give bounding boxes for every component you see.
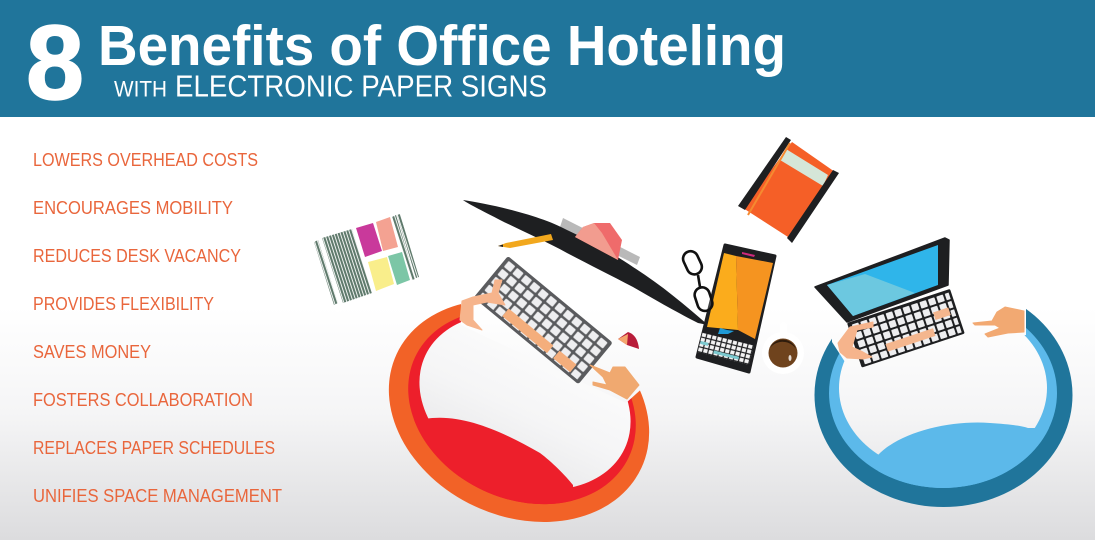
laptop [815, 238, 965, 368]
red chair [388, 304, 650, 522]
chair seat [414, 418, 573, 504]
benefits list: UNIFIES SPACE MANAGEMENT [33, 486, 282, 506]
icon: coffee cup [762, 322, 804, 374]
chair inner red ring [376, 274, 668, 540]
icon: printed paper [308, 208, 425, 312]
icon: monitor seen from above [463, 200, 708, 325]
chair seat [878, 422, 1049, 488]
benefits list: REPLACES PAPER SCHEDULES [33, 438, 275, 458]
chair outer orange shell [352, 259, 686, 540]
laptop keyboard [847, 289, 965, 368]
right hand pointing [590, 365, 639, 399]
benefits list: REDUCES DESK VACANCY [33, 246, 241, 266]
title: Benefits of Office Hoteling [98, 14, 786, 78]
left hand on laptop [838, 322, 873, 359]
chair outer blue shell [814, 283, 1072, 507]
key highlight right [553, 351, 577, 372]
chair hollow [839, 303, 1047, 473]
benefits list: FOSTERS COLLABORATION [33, 390, 253, 410]
icon: monitor stand [560, 218, 640, 265]
benefits list: LOWERS OVERHEAD COSTS [33, 150, 258, 170]
benefits list: PROVIDES FLEXIBILITY [33, 294, 214, 314]
header banner [0, 0, 1095, 122]
chair opening [832, 270, 1026, 362]
numeral 8: 8 [26, 4, 84, 122]
blue chair [814, 309, 1072, 507]
space bar highlight [502, 308, 553, 353]
left hand on keyboard [460, 280, 505, 330]
benefits list: SAVES MONEY [33, 342, 151, 362]
icon: pencil [498, 234, 553, 248]
chair hollow [391, 281, 659, 523]
phone keyboard [697, 332, 754, 365]
benefits list: ENCOURAGES MOBILITY [33, 198, 233, 218]
icon: notebook [738, 137, 839, 243]
icon: monitor base [575, 223, 622, 260]
benefits list [33, 150, 282, 506]
icon: smartphone [697, 245, 775, 372]
icon: glasses [681, 249, 714, 313]
chair inner light blue ring [829, 298, 1057, 488]
icon: small pie wedge [618, 332, 639, 349]
chair opening [461, 250, 670, 403]
laptop screen [815, 238, 949, 322]
subtitle: WITH [114, 76, 167, 102]
subtitle: ELECTRONIC PAPER SIGNS [175, 68, 547, 104]
keyboard left [474, 256, 613, 384]
right hand pointing [973, 307, 1024, 337]
